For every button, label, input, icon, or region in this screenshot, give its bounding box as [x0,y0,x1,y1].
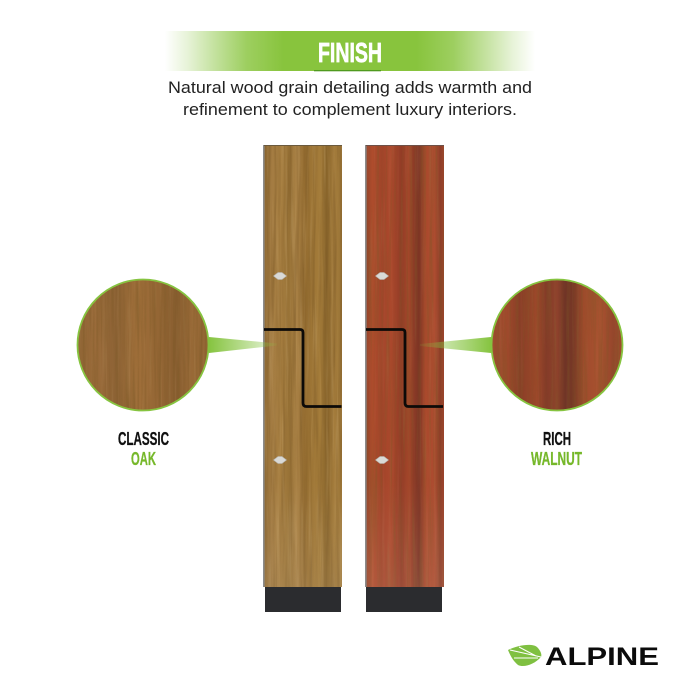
walnut lower handle [376,456,388,464]
logo: Alpine [508,643,659,671]
label: classic oak [118,429,169,469]
label: rich walnut: RICH [543,429,571,449]
walnut locker body [365,145,444,587]
oak swatch circle [76,278,210,412]
label: classic oak: OAK [131,449,156,469]
label: rich walnut: WALNUT [531,449,582,469]
walnut swatch circle [490,278,624,412]
description text: refinement to complement luxury interiors. [183,100,517,119]
description text [168,78,532,119]
oak locker door seam [264,330,342,406]
label: classic oak: CLASSIC [118,429,169,449]
icon: leaf [508,645,541,666]
connector: oak swatch to locker [209,337,277,353]
logo wordmark: ALPINE [545,643,659,671]
walnut upper handle [376,272,388,280]
oak locker [263,145,342,612]
walnut locker base [366,587,442,612]
heading band: FINISH: FINISH [318,37,382,68]
oak locker body [263,145,342,587]
walnut locker door seam [366,330,443,406]
walnut locker [365,145,444,612]
connector: walnut swatch to locker [420,337,491,353]
oak upper handle [274,272,286,280]
oak locker base [265,587,341,612]
description text: Natural wood grain detailing adds warmth and [168,78,532,97]
heading band: FINISH [165,31,535,71]
label: rich walnut [531,429,582,469]
oak lower handle [274,456,286,464]
